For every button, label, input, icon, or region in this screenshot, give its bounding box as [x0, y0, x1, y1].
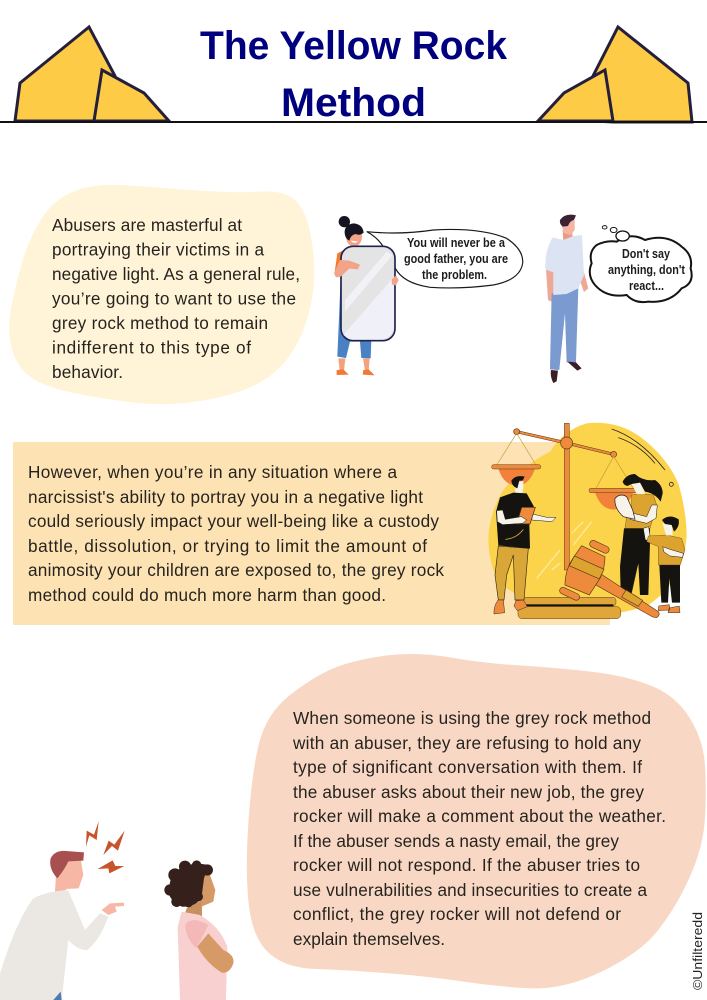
text block: behavior.: [52, 362, 123, 382]
top: [178, 912, 227, 1000]
woman with baby and child: [615, 474, 685, 613]
text block: type of significant conversation with them. If: [293, 757, 642, 777]
scale stand: [564, 423, 569, 570]
feet: [337, 369, 375, 375]
panel: abusers text blob: [9, 185, 314, 404]
thought bubble: Don't say: [622, 247, 670, 261]
speech bubble: good father, you are: [404, 252, 508, 266]
text block: negative light. As a general rule,: [52, 264, 300, 284]
ground line: [0, 121, 707, 123]
jeans hint: [53, 992, 62, 1000]
text block: indifferent to this type of: [52, 338, 251, 358]
text block: However, when you’re in any situation where a: [28, 462, 397, 482]
thought bubble: react...: [629, 279, 664, 293]
illustration: scales of justice, gavel and family: [488, 423, 687, 619]
text block: If the abuser sends a nasty email, the grey: [293, 831, 619, 851]
text block: the abuser asks about their new job, the grey: [293, 782, 644, 802]
icon: left yellow rocks: [15, 27, 169, 121]
text block: rocker will not respond. If the abuser tries to: [293, 855, 640, 875]
icon: right yellow rocks: [538, 27, 692, 122]
crossed arms: [197, 933, 234, 973]
shoes: [551, 362, 582, 383]
shirt: [335, 248, 350, 278]
band background: [13, 442, 610, 625]
pointing hand: [102, 903, 124, 915]
title: Method: [281, 81, 426, 125]
text block: portraying their victims in a: [52, 240, 264, 260]
text block: battle, dissolution, or trying to limit the amount of: [28, 536, 427, 556]
legs: [337, 277, 371, 358]
man with clipboard: [494, 476, 556, 614]
sweater: [0, 891, 108, 1000]
hair: [50, 851, 84, 878]
text block: [292, 708, 666, 949]
text block: [28, 462, 444, 605]
blob background: [9, 185, 314, 404]
panel: custody band: [13, 442, 610, 625]
speech bubble: the problem.: [422, 268, 487, 282]
title: The Yellow Rock: [200, 24, 508, 68]
child: [659, 565, 680, 603]
thought bubble: [590, 226, 692, 302]
title: [200, 24, 508, 125]
text block: animosity your children are exposed to, the grey rock: [28, 560, 444, 580]
text block: [52, 215, 300, 382]
text block: could seriously impact your well-being like a custody: [28, 511, 439, 531]
curly hair: [164, 860, 213, 907]
text block: with an abuser, they are refusing to hold any: [292, 733, 641, 753]
neck and head: [563, 229, 573, 241]
text block: use vulnerabilities and insecurities to create a: [293, 880, 647, 900]
glare lines: [537, 522, 592, 578]
left pan: [497, 433, 536, 465]
text block: narcissist's ability to portray you in a negative light: [28, 487, 423, 507]
neck and head: [55, 875, 67, 892]
head: [346, 227, 362, 247]
arm and hand: [334, 260, 360, 277]
scale beam: [517, 432, 613, 454]
yellow blob: [488, 423, 687, 615]
text block: When someone is using the grey rock method: [293, 708, 651, 728]
panel: grey rock explanation blob: [247, 654, 706, 988]
woman: [620, 528, 650, 595]
thought bubble: anything, don't: [608, 263, 686, 277]
text block: you’re going to want to use the: [52, 288, 296, 308]
text block: explain themselves.: [293, 929, 445, 949]
watermark: ©Unfilteredd: [690, 912, 705, 990]
speech bubble: [367, 229, 523, 288]
right pan: [596, 456, 633, 488]
gavel base: [523, 597, 616, 606]
illustration: standing man: [545, 215, 588, 383]
illustration: woman holding mirror: [334, 216, 399, 375]
illustration: angry man pointing: [0, 821, 125, 1000]
gavel: [559, 539, 659, 618]
text block: grey rock method to remain: [52, 313, 268, 333]
arms: [546, 260, 588, 302]
shirt: [545, 235, 584, 295]
text block: Abusers are masterful at: [52, 215, 242, 235]
decorative arcs: [612, 429, 665, 470]
text block: conflict, the grey rocker will not defend or: [293, 904, 621, 924]
header: [0, 24, 707, 125]
mirror: [341, 246, 395, 341]
speech bubble: You will never be a: [407, 236, 506, 250]
text block: rocker will make a comment about the weather.: [293, 806, 666, 826]
pants: [550, 288, 578, 370]
text block: method could do much more harm than good.: [28, 585, 386, 605]
neck and face: [185, 900, 202, 917]
anger bolts: [86, 821, 125, 873]
blob background: [247, 654, 706, 988]
illustration: woman with crossed arms: [164, 860, 234, 1000]
